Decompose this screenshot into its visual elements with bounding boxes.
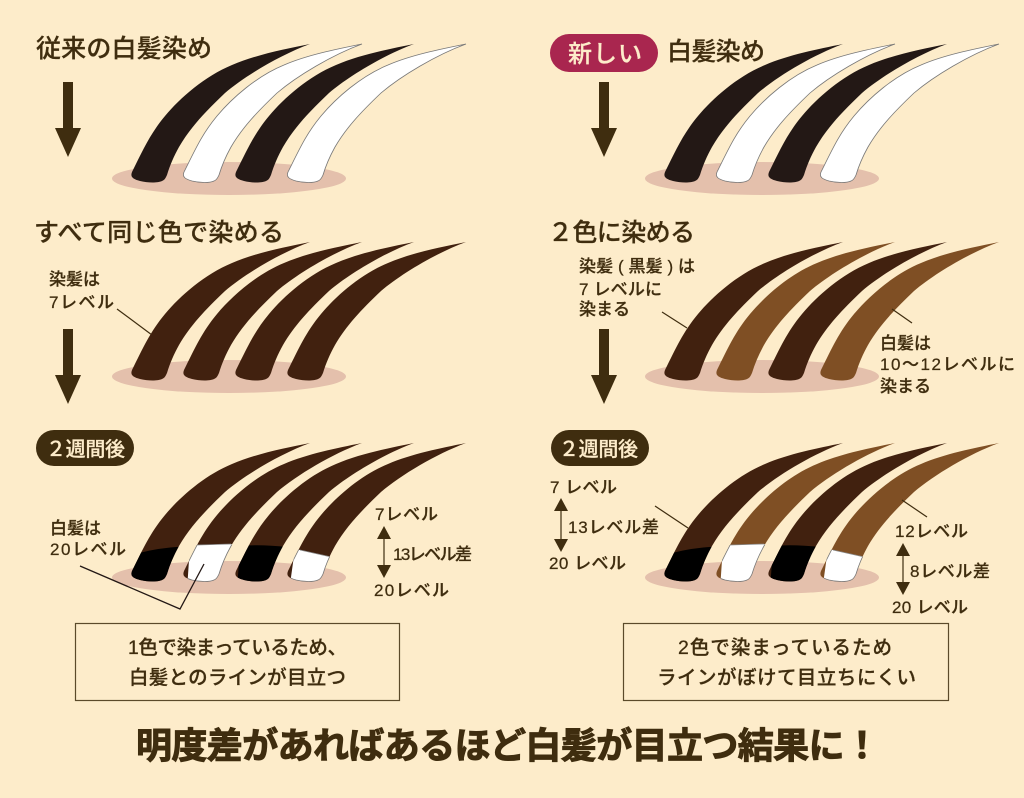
conclusion headline: 明度差があればあるほど白髪が目立つ結果に！: [136, 725, 880, 766]
callout: two-colour result: ラインがぼけて目立ちにくい: [657, 667, 916, 689]
heading: dye all one colour: すべて同じ色で染める: [34, 219, 284, 247]
hair diagram: two-colour dye: [645, 242, 999, 393]
label: 13 level difference: 13レベル差: [568, 518, 659, 537]
label: white hair level 10 to 12: 10～12レベルに: [880, 355, 1015, 374]
label: white hair level 20: 20レベル: [50, 540, 126, 559]
heading: dye two colours: ２色に染める: [548, 219, 695, 247]
label: 20 level: 20 レベル: [892, 598, 968, 617]
heading: hair dye: 白髪染め: [667, 38, 765, 66]
leader line: white hair: [80, 564, 204, 609]
leader line: light hair: [902, 500, 927, 517]
badge: two weeks later: [36, 430, 134, 466]
badge: two weeks later: [551, 430, 649, 466]
label: 20 level: 20 レベル: [549, 554, 626, 573]
badge: new: 新しい: [568, 41, 642, 68]
panel: conventional dye: [34, 35, 472, 700]
label: dyed black hair level 7: 染髪 ( 黒髪 ) は: [579, 256, 695, 276]
arrow: step 2: [55, 329, 81, 404]
heading: conventional dye: 従来の白髪染め: [36, 35, 212, 63]
badge: new: [550, 34, 658, 72]
label: dyed black hair level 7: 7 レベルに: [579, 280, 662, 299]
hair diagram: black and white hair before dye: [112, 44, 466, 195]
arrow: step 2: [591, 329, 617, 404]
callout: one-colour result: 白髪とのラインが目立つ: [129, 667, 346, 689]
arrow: 13 level difference: [377, 526, 391, 578]
arrow: 13 level difference: [554, 498, 568, 552]
leader line: dyed black hair: [662, 312, 687, 328]
label: 8 level difference: 8レベル差: [910, 562, 990, 581]
arrow: step 1: [591, 82, 617, 157]
label: white hair level 10 to 12: 白髪は: [880, 333, 931, 353]
label: dyed hair level 7: 染髪は: [49, 269, 100, 289]
label: dyed black hair level 7: 染まる: [579, 300, 630, 319]
label: white hair level 20: 白髪は: [50, 518, 101, 538]
callout: one-colour result: [76, 624, 400, 700]
hair diagram: regrowth after two weeks, one colour: [112, 443, 466, 594]
label: 12 level: 12レベル: [895, 522, 968, 541]
arrow: 8 level difference: [896, 543, 910, 595]
label: 13 level difference: 13レベル差: [393, 545, 472, 564]
label: 7 level: 7 レベル: [550, 478, 617, 497]
leader line: dyed hair: [655, 506, 688, 528]
label: 20 level: 20レベル: [374, 581, 449, 600]
label: dyed hair level 7: 7レベル: [49, 293, 114, 312]
label: 7 level: 7レベル: [375, 505, 438, 524]
hair diagram: black and white hair before dye: [645, 44, 999, 195]
badge: two weeks later: ２週間後: [46, 438, 125, 461]
label: white hair level 10 to 12: 染まる: [880, 377, 931, 396]
callout: two-colour result: [624, 624, 948, 700]
leader line: white hair: [892, 309, 912, 323]
callout: two-colour result: 2色で染まっているため: [678, 637, 892, 659]
arrow: step 1: [55, 82, 81, 157]
hair diagram: regrowth after two weeks, two colours: [645, 443, 999, 594]
hair diagram: all hair dyed dark brown: [112, 242, 466, 393]
callout: one-colour result: 1色で染まっているため、: [128, 637, 347, 659]
badge: two weeks later: ２週間後: [559, 438, 638, 461]
panel: new dye: [548, 34, 1015, 700]
leader line: dyed hair: [117, 309, 152, 335]
